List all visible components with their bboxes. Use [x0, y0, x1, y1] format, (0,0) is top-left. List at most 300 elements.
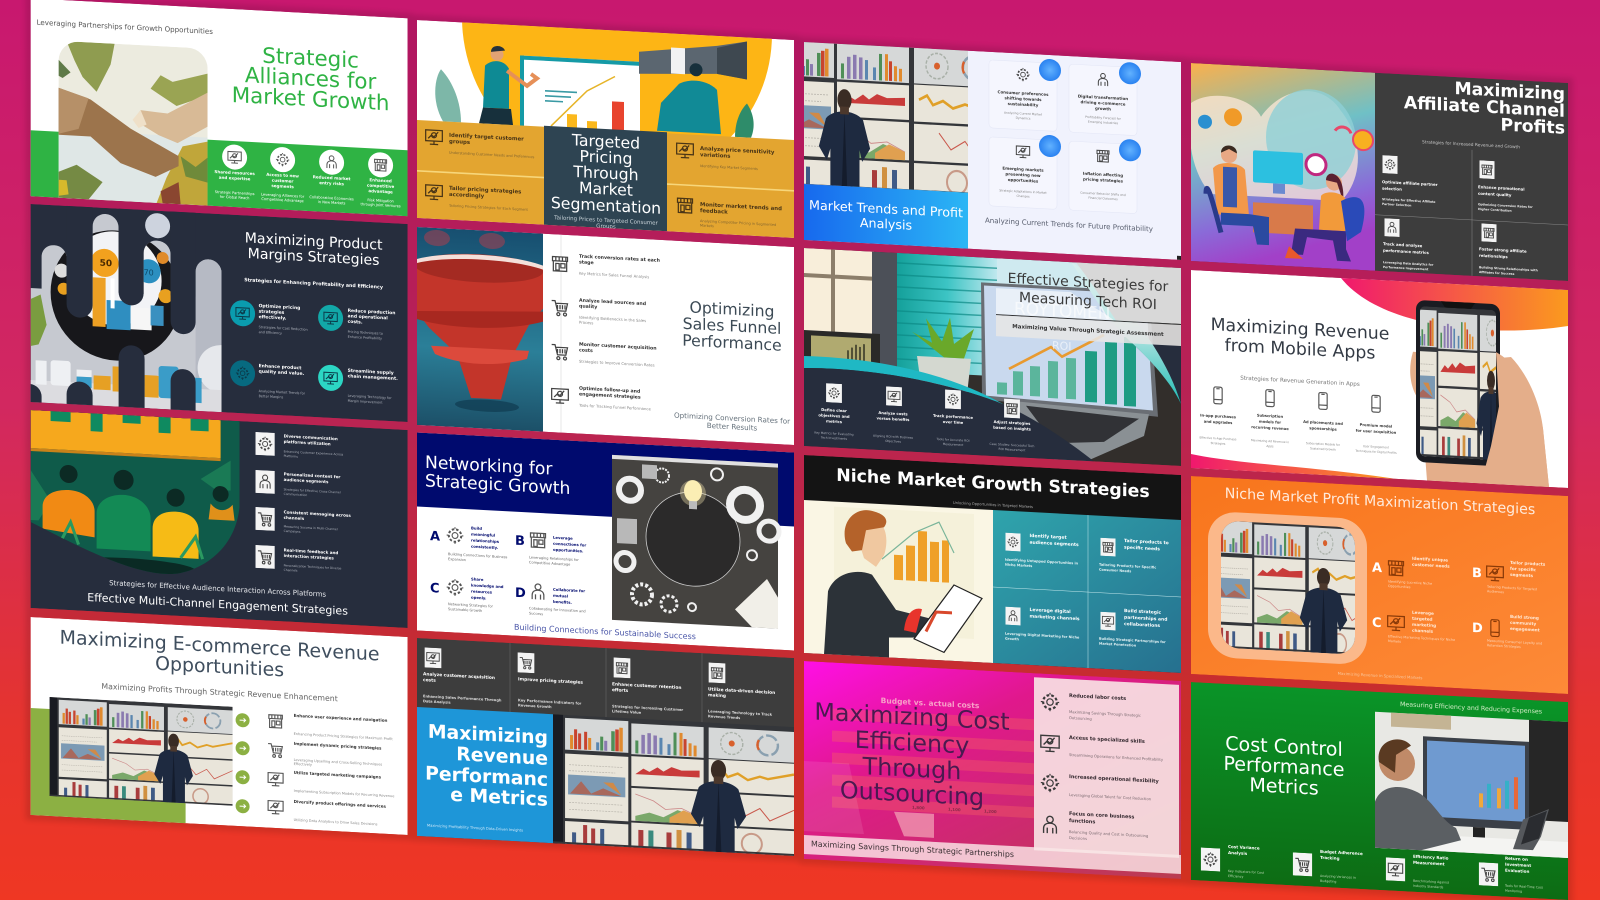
strategy text: Optimize pricing: [259, 304, 300, 311]
network text: Build: [471, 525, 482, 531]
card text: Analyzing Current Market: [1004, 111, 1042, 117]
network text: Success: [529, 611, 543, 616]
card text: driving e-commerce: [1081, 99, 1126, 107]
icons row: [222, 144, 393, 178]
niche text: [1005, 532, 1169, 649]
revenue text: Enhance user experience and navigation: [294, 713, 388, 723]
funnel text: Monitor customer acquisition: [579, 343, 657, 352]
image: analyst and dashboard wall: [553, 714, 794, 856]
step text: objectives and: [818, 412, 850, 419]
teal panel: [993, 510, 1181, 673]
column dividers: [510, 643, 702, 722]
step text: Adjust strategies: [994, 419, 1030, 426]
icon glyphs: [228, 150, 387, 172]
strategy text: Margin Improvement: [348, 399, 383, 405]
circle glyphs: [236, 308, 337, 385]
image: analyst at monitor: [1375, 712, 1568, 858]
title: Alliances for: [245, 63, 376, 95]
niche text: audience segments: [1030, 540, 1079, 548]
strategy text: [259, 303, 398, 405]
card text: Financial Outcomes: [1088, 196, 1118, 201]
benefit panel: [1034, 677, 1179, 858]
strategy text: costs.: [348, 319, 363, 326]
funnel text: Key Metrics for Sales Funnel Analysis: [579, 271, 649, 279]
benefits text: Competitive Advantage: [261, 197, 305, 203]
card text: opportunities: [1008, 177, 1039, 184]
step text: [814, 407, 1035, 453]
network text: Building Connections for Business: [448, 552, 507, 559]
metric text: Monitoring: [1505, 889, 1522, 894]
affiliate text: content quality: [1478, 191, 1512, 198]
network text: Leveraging Relationships for: [529, 555, 579, 562]
funnel text: Track conversion rates at each: [579, 255, 660, 264]
benefits text: segments: [271, 183, 294, 189]
metric text: Enhance customer retention: [612, 682, 681, 691]
benefits text: Reduced market: [313, 174, 350, 181]
benefit panel: Reduced labor costs: [1069, 693, 1126, 702]
strategy text: effectively.: [259, 314, 287, 322]
image: gears in pill cut-outs: 50: [100, 259, 112, 269]
title: Strategic: [262, 44, 359, 74]
pricing icons: [426, 130, 693, 213]
network text: opportunities.: [553, 547, 584, 554]
card text: Consumer Behavior Shifts and: [1080, 191, 1126, 197]
strategies text: channels: [284, 515, 305, 521]
benefits text: Enhanced: [369, 177, 392, 183]
panel: cost control metrics slide: [1191, 682, 1568, 900]
subtitle: Unlocking Opportunities in Targeted Markets: [953, 501, 1033, 509]
network text: Share: [471, 576, 483, 582]
cards: [989, 60, 1137, 214]
affiliate text: Higher Contribution: [1478, 207, 1512, 213]
network text: Collaborating for Innovation and: [529, 606, 586, 613]
revenue text: Effectively: [294, 762, 312, 767]
metric text: Return on: [1505, 856, 1528, 862]
metric text: Enhancing Sales Performance Through: [423, 694, 501, 702]
image: gears in pill cut-outs: 70: [144, 268, 154, 278]
affiliate text: Building Strong Relationships with: [1479, 265, 1538, 272]
revenue text: Implementing Subscription Models for Recurring Revenue: [294, 789, 394, 798]
center title panel: Groups: [596, 224, 616, 231]
metric text: Lifetime Value: [612, 709, 642, 715]
network text: knowledge and: [471, 582, 504, 589]
blue title panel: Maximizing: [428, 722, 548, 749]
metric text: Investment: [1505, 862, 1531, 868]
revenue text: Techniques for Digital Profits: [1354, 449, 1397, 455]
niche text: specific needs: [1124, 545, 1160, 552]
revenue text: Enhancing Product Pricing Strategies for Maximum Profit: [294, 732, 393, 741]
funnel text: stage: [579, 259, 594, 266]
title: Maximizing Product: [245, 230, 382, 254]
step text: Objectives: [885, 439, 901, 444]
letter markers: [1372, 561, 1483, 636]
subtitle: Measuring Efficiency and Reducing Expenses: [1400, 701, 1542, 716]
revenue text: Sustained Growth: [1310, 446, 1336, 452]
revenue text: models for: [1259, 420, 1281, 425]
bottom strip: Maximizing Savings Through Strategic Partnerships: [811, 839, 1014, 859]
affiliate text: selection: [1382, 186, 1402, 192]
metric icons: [1201, 848, 1498, 886]
revenue text: sponsorships: [1309, 426, 1338, 432]
revenue text: for user acquisition: [1356, 429, 1397, 435]
card text: Dynamics: [1016, 116, 1031, 121]
panel: strategic alliances slide: [31, 0, 408, 216]
pricing text: Understanding Customer Needs and Preferences: [449, 151, 534, 159]
panel: product margins slide: [30, 204, 408, 422]
niche text: Tailor products to: [1124, 539, 1169, 546]
metric text: [1228, 841, 1544, 895]
network text: connections for: [553, 541, 586, 548]
title: Opportunities: [155, 653, 284, 681]
benefit panel: Focus on core business: [1069, 811, 1134, 821]
timeline: [560, 235, 562, 433]
dark pill overlay: [30, 206, 196, 411]
card icons: [1016, 68, 1109, 162]
title: Profits: [1501, 115, 1565, 139]
profit text: Tailor products: [1510, 560, 1545, 567]
metric text: Key Performance Indicators for: [518, 698, 581, 706]
revenue text: Ad placements and: [1303, 420, 1343, 426]
blue title panel: Performanc: [425, 763, 548, 791]
benefits text: in New Markets: [318, 200, 346, 205]
strategies text: Consistent messaging across: [284, 509, 351, 518]
profit text: customer needs: [1412, 562, 1450, 569]
title: Niche Market Profit Maximization Strategies: [1225, 486, 1535, 518]
strategies text: Enhancing Customer Experience Across: [284, 449, 343, 457]
metric text: Budgeting: [1320, 879, 1336, 884]
metric text: Analyzing Variances in: [1320, 874, 1356, 880]
pricing text: Tailoring Pricing Strategies for Each Segment: [448, 204, 529, 212]
profit text: Retention Strategies: [1487, 643, 1521, 649]
step text: versus benefits: [877, 415, 910, 422]
letter markers: [430, 529, 526, 601]
metric text: Benchmarking Against: [1413, 879, 1449, 885]
strategies text: Real-time feedback and: [284, 547, 338, 555]
strategy text: Enhance Profitability: [348, 335, 382, 341]
translucent title panel: ROI: [1052, 339, 1072, 353]
funnel text: Tools for Tracking Funnel Performance: [578, 403, 651, 411]
center title panel: Pricing: [580, 146, 632, 168]
card text: presenting new: [1005, 171, 1041, 178]
profit text: targeted: [1412, 616, 1433, 622]
niche text: Market Penetration: [1099, 642, 1137, 648]
pricing text: Analyzing Competitor Pricing in Segmented: [700, 219, 776, 227]
profit text: Audiences: [1487, 589, 1504, 594]
strategy text: Pricing Techniques to: [348, 330, 383, 336]
network icons: [447, 527, 546, 601]
metric text: Tracking: [1320, 855, 1340, 861]
card text: Inflation affecting: [1083, 171, 1123, 178]
faint budget table: [804, 692, 1034, 843]
panel: e-commerce revenue slide: [31, 617, 408, 835]
pricing text: Tailor pricing strategies: [449, 186, 521, 196]
panel: revenue performance metrics slide: [417, 638, 794, 856]
illustration: two people at computer: [1189, 63, 1375, 271]
revenue text: Strategies: [1211, 441, 1226, 446]
benefits text: advantage: [368, 188, 393, 195]
benefit panel: Maximizing Savings Through Strategic: [1069, 710, 1141, 718]
step text: metrics: [826, 418, 843, 424]
image: bulb and gears: [612, 455, 779, 629]
panel: multi-channel engagement slide: [31, 410, 408, 628]
funnel text: Analyze lead sources and: [579, 299, 646, 307]
panel: niche profit maximization slide: [1191, 476, 1568, 694]
pricing text: feedback: [700, 208, 728, 216]
card text: Digital transformation: [1078, 94, 1128, 101]
funnel text: engagement strategies: [579, 391, 641, 401]
strategy text: and Efficiency: [259, 330, 282, 335]
step text: Analyze costs: [878, 410, 908, 416]
title: Maximizing Revenue: [1211, 315, 1389, 345]
network text: openly.: [471, 595, 487, 601]
revenue text: recurring revenue: [1251, 425, 1289, 431]
step text: Aligning ROI with Business: [873, 434, 913, 440]
niche text: Building Strategic Partnerships for: [1099, 637, 1166, 644]
funnel text: [578, 254, 660, 412]
title: Optimizing: [690, 297, 774, 321]
metric text: Efficiency: [1228, 874, 1243, 879]
niche text: marketing channels: [1030, 614, 1080, 622]
metric text: Evaluation: [1505, 868, 1529, 874]
pricing text: Identifying Key Market Segments: [700, 164, 758, 171]
benefits text: through Joint Ventures: [361, 202, 401, 208]
title: Metrics: [1249, 773, 1319, 800]
profit text: Leverage: [1412, 610, 1434, 616]
faint budget table: 1,800: [912, 805, 925, 810]
subtitle: Optimizing Conversion Rates for: [674, 411, 790, 426]
metric text: Leveraging Technology to Track: [708, 709, 772, 717]
profit text: Opportunities: [1388, 584, 1411, 589]
card text: sustainability: [1008, 101, 1039, 108]
metric text: Efficiency Ratio: [1413, 854, 1448, 861]
affiliate text: [1382, 179, 1538, 277]
step text: based on insights: [993, 425, 1032, 432]
metric text: Revenue Growth: [518, 703, 552, 709]
blue title panel: Market Trends and Profit: [809, 197, 963, 220]
revenue text: [294, 713, 394, 827]
revenue text: Maximizing Ad Revenue in: [1251, 438, 1289, 444]
title: Efficiency: [855, 726, 969, 760]
benefit panel: Leveraging Global Talent for Cost Reduction: [1069, 793, 1152, 801]
strategies text: platforms utilization: [284, 439, 331, 446]
strategy text: quality and value.: [259, 369, 305, 377]
strategies text: interaction strategies: [284, 553, 334, 561]
step text: Case Studies: Successful Tech: [990, 442, 1034, 448]
revenue text: Leveraging Upselling and Cross-Selling Techniques: [294, 758, 382, 767]
network text: mutual: [553, 593, 568, 599]
image: desk with laptop and plant: [804, 248, 1181, 466]
faint budget table: Budget vs. actual costs: [881, 696, 980, 710]
metric text: making: [708, 692, 726, 699]
step icons: [826, 383, 1020, 418]
pricing text: Monitor market trends and: [700, 202, 782, 212]
benefits text: Access to new: [266, 172, 299, 179]
strategy text: chain management.: [348, 373, 398, 382]
step text: ROI Measurement: [999, 447, 1026, 452]
faint budget table: 1,100: [948, 807, 961, 812]
translucent title panel: [996, 258, 1181, 359]
benefit panel: Balancing Quality and Cost in Outsourcing: [1069, 830, 1148, 838]
metric text: Data Analysis: [423, 699, 451, 705]
revenue text: In-app purchases: [1200, 413, 1236, 419]
metric text: Utilize data-driven decision: [708, 687, 775, 696]
panel: networking slide: [417, 432, 794, 650]
illustration: analyst with tablet: [804, 500, 993, 663]
strategy text: Better Margins: [259, 394, 283, 399]
strategies text: Strategies for Effective Cross-Channel: [284, 487, 341, 494]
title: Market Growth: [232, 83, 389, 116]
benefits text: Risk Mitigation: [367, 198, 394, 204]
profit text: Identify unique: [1412, 556, 1448, 563]
panel: niche market growth slide: [804, 455, 1181, 673]
caption: Maximizing Revenue in Specialized Markets: [1338, 671, 1422, 680]
card text: Emerging Industries: [1088, 120, 1118, 125]
title: Margins Strategies: [248, 246, 380, 269]
gradient arcs: [1191, 270, 1568, 488]
step text: Tools for Accurate ROI: [937, 437, 969, 443]
image frame: [1199, 510, 1369, 665]
metric text: [423, 671, 775, 722]
teal icon circles: [230, 300, 343, 392]
row icons: [268, 715, 283, 814]
revenue text: User Engagement: [1363, 444, 1389, 449]
center title panel: Market: [579, 178, 633, 200]
benefits text: for Global Reach: [220, 195, 249, 200]
image: analyst and dashboard wall: [50, 697, 233, 806]
strategies text: Platforms: [284, 454, 298, 459]
network text: relationships: [471, 538, 500, 544]
image: gears in pill cut-outs: [30, 214, 222, 412]
affiliate text: Performance Improvement: [1383, 265, 1429, 271]
panel: mobile apps slide: [1191, 270, 1568, 488]
funnel text: Process: [579, 320, 593, 325]
blue title panel: Maximizing Profitability Through Data-Driven Insights: [427, 824, 523, 833]
blue title panel: e Metrics: [450, 785, 548, 811]
letter markers: C: [1372, 616, 1382, 631]
image: handshake over map: [59, 41, 208, 206]
niche text: Niche Markets: [1005, 563, 1032, 568]
title: Networking for: [425, 453, 552, 480]
strategy text: Streamline supply: [348, 369, 394, 376]
title: from Mobile Apps: [1225, 336, 1375, 364]
blue title panel: [804, 184, 968, 249]
card text: Consumer preferences: [998, 89, 1048, 97]
strategies text: Channels: [284, 568, 298, 573]
network text: Expansion: [448, 557, 466, 562]
title: Strategic Growth: [425, 471, 570, 499]
title: Cost Control: [1225, 732, 1343, 761]
strategies text: Personalization Techniques for Diverse: [284, 563, 341, 570]
benefits text: Collaborative Economies: [309, 195, 354, 201]
strategies text: audience segments: [284, 477, 329, 484]
affiliate text: Optimize affiliate partner: [1382, 179, 1438, 187]
strategies text: Campaigns: [284, 529, 301, 534]
metric text: Analyze customer acquisition: [423, 672, 495, 681]
metric icons: [425, 647, 725, 683]
pricing text: Identify target customer: [449, 133, 524, 143]
step text: Define clear: [821, 407, 847, 413]
network text: resources: [471, 589, 493, 595]
niche text: Leveraging Digital Marketing for Niche: [1005, 632, 1079, 640]
niche text: Consumer Needs: [1099, 568, 1131, 573]
affiliate text: Foster strong affiliate: [1479, 246, 1527, 254]
funnel text: Strategies to Improve Conversion Rates: [579, 359, 655, 368]
title: Affiliate Channel: [1404, 93, 1565, 122]
benefits text: Leveraging Alliances for: [261, 193, 304, 199]
card text: pricing strategies: [1083, 176, 1124, 184]
strategy text: Leveraging Technology for: [348, 394, 392, 400]
revenue text: Diversify product offerings and services: [294, 799, 387, 809]
benefit panel: Outsourcing: [1069, 716, 1092, 721]
subtitle: Leveraging Partnerships for Growth Opportunities: [37, 18, 213, 36]
card text: Emerging markets: [1002, 166, 1044, 173]
letter markers: D: [1472, 621, 1483, 636]
affiliate text: relationships: [1479, 253, 1508, 259]
orange icons: [1388, 561, 1503, 637]
navy header band: [417, 432, 794, 526]
metric text: efforts: [612, 687, 629, 694]
title: Outsourcing: [840, 776, 984, 812]
niche text: partnerships and: [1124, 615, 1167, 623]
profit text: channels: [1412, 628, 1434, 634]
grid dividers: [1375, 145, 1568, 281]
strategies text: [284, 433, 351, 575]
profit text: Tailoring Products for Targeted: [1487, 585, 1537, 591]
pricing text: accordingly: [449, 192, 485, 200]
metric text: Strategies for Increasing Customer: [612, 704, 683, 712]
arrow circles: [236, 713, 250, 814]
card text: [998, 89, 1128, 204]
profit text: [1388, 553, 1546, 651]
strategies text: Personalized content for: [284, 471, 340, 479]
mustard panels: [417, 120, 794, 238]
card text: growth: [1095, 106, 1111, 111]
funnel text: quality: [579, 303, 597, 310]
step text: over time: [943, 419, 964, 425]
letter markers: D: [515, 586, 526, 601]
revenue text: [1200, 410, 1397, 455]
pricing text: [448, 133, 782, 232]
niche icons: [1006, 533, 1116, 631]
benefits text: customer: [272, 178, 293, 184]
image: red funnel: [415, 227, 543, 432]
step text: Track performance: [933, 413, 973, 420]
center title panel: Tailoring Prices to Targeted Consumer: [554, 215, 658, 227]
funnel text: costs: [579, 347, 593, 354]
icon: grey circle: [145, 213, 170, 239]
letter markers: A: [430, 529, 440, 545]
subtitle: Strategies for Enhancing Profitability and Efficiency: [244, 277, 384, 291]
teal curve and dark waves: [804, 248, 1181, 466]
niche text: Identify target: [1030, 534, 1067, 541]
network text: Sustainable Growth: [448, 607, 482, 613]
dividers: [417, 170, 794, 192]
revenue text: Subscription Models for: [1306, 441, 1340, 447]
metric text: Revenue Trends: [708, 714, 740, 720]
strategy text: Analyzing Market Trends for: [259, 389, 305, 396]
panel: tech ROI slide: [804, 248, 1181, 466]
profit text: Effective Marketing Techniques for Niche: [1388, 634, 1455, 642]
benefit panel: Streamlining Operations for Enhanced Profitability: [1069, 753, 1164, 762]
pricing text: variations: [700, 152, 730, 160]
center title panel: Targeted: [572, 130, 640, 153]
translucent title panel: Maximizing Value Through Strategic Assessment: [1012, 324, 1164, 338]
niche text: Identifying Untapped Opportunities in: [1005, 558, 1078, 566]
letter markers: C: [430, 581, 440, 597]
blue title panel: [417, 707, 553, 843]
subtitle: Strategies for Increased Revenue and Growth: [1422, 139, 1520, 150]
affiliate text: Affiliates for Success: [1479, 270, 1515, 276]
